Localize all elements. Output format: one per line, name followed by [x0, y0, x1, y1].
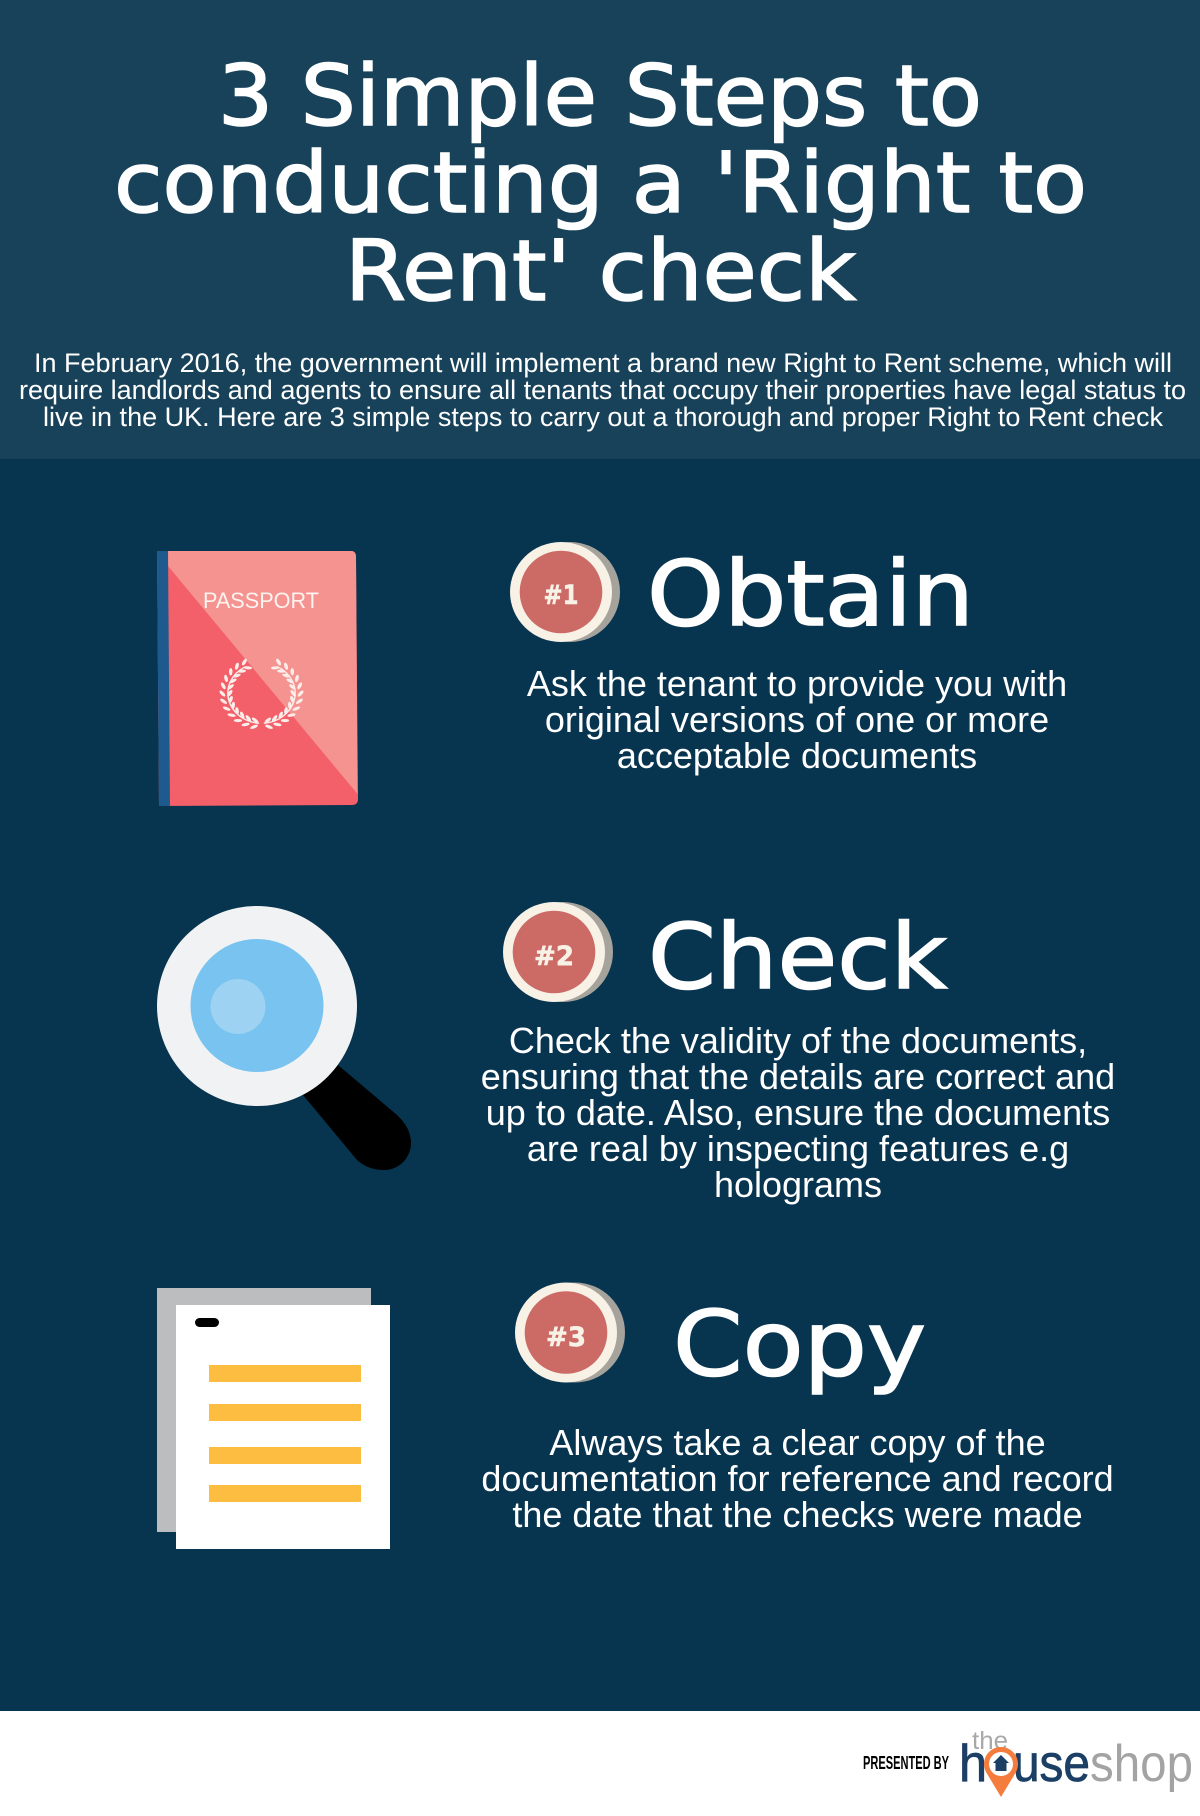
- logo: the house shop: h: [959, 1735, 987, 1793]
- step 3 text: Always take a clear copy of the: [549, 1422, 1046, 1463]
- step 2 text: are real by inspecting features e.g: [527, 1128, 1069, 1169]
- panel: footer: [0, 1711, 1200, 1816]
- step 3 badge: [515, 1282, 625, 1382]
- intro text: live in the UK. Here are 3 simple steps to carry out a thorough and proper Right to Rent check: [43, 402, 1163, 432]
- step 3 heading: Copy: [673, 1292, 926, 1397]
- step 1 text: Ask the tenant to provide you with: [527, 663, 1067, 704]
- logo: the house shop: [959, 1727, 1193, 1797]
- passport label: PASSPORT: [203, 588, 319, 613]
- step 2 badge: #2: [534, 941, 574, 972]
- panel: header: [0, 0, 1200, 459]
- step 1 heading: Obtain: [647, 542, 974, 647]
- intro text: [19, 348, 1186, 432]
- icon: location pin: [984, 1747, 1018, 1797]
- step 2 text: Check the validity of the documents,: [509, 1020, 1087, 1061]
- icon: magnifying glass: [157, 906, 411, 1170]
- step 3 text: documentation for reference and record: [481, 1458, 1114, 1499]
- intro text: require landlords and agents to ensure all tenants that occupy their properties have legal status to: [19, 375, 1186, 405]
- icon: passport: [157, 551, 358, 806]
- logo: the house shop: the: [972, 1727, 1008, 1755]
- step 3 text: [481, 1422, 1114, 1535]
- step 1 text: [527, 663, 1067, 776]
- logo: the house shop: shop: [1090, 1735, 1193, 1793]
- step 1 text: original versions of one or more: [545, 699, 1049, 740]
- step 1 text: acceptable documents: [617, 735, 977, 776]
- icon: documents: [157, 1288, 390, 1549]
- step 1 badge: [510, 542, 620, 642]
- step 3 text: the date that the checks were made: [512, 1494, 1083, 1535]
- step 2 text: [481, 1020, 1115, 1205]
- step 2 heading: Check: [648, 905, 947, 1010]
- presented by: PRESENTED BY: [863, 1753, 949, 1773]
- step 2 text: ensuring that the details are correct and: [481, 1056, 1115, 1097]
- title: 3 Simple Steps to: [218, 47, 982, 145]
- step 3 badge: #3: [546, 1322, 586, 1353]
- title: Rent' check: [345, 222, 856, 320]
- title: [114, 47, 1087, 320]
- logo: the house shop: use: [1013, 1735, 1090, 1793]
- step 1 badge: #1: [544, 580, 578, 611]
- intro text: In February 2016, the government will implement a brand new Right to Rent scheme, which will: [34, 348, 1172, 378]
- title: conducting a 'Right to: [114, 134, 1087, 232]
- step 2 text: up to date. Also, ensure the documents: [486, 1092, 1110, 1133]
- laurel wreath: [218, 657, 305, 731]
- step 2 badge: [503, 902, 613, 1002]
- step 2 text: holograms: [714, 1164, 882, 1205]
